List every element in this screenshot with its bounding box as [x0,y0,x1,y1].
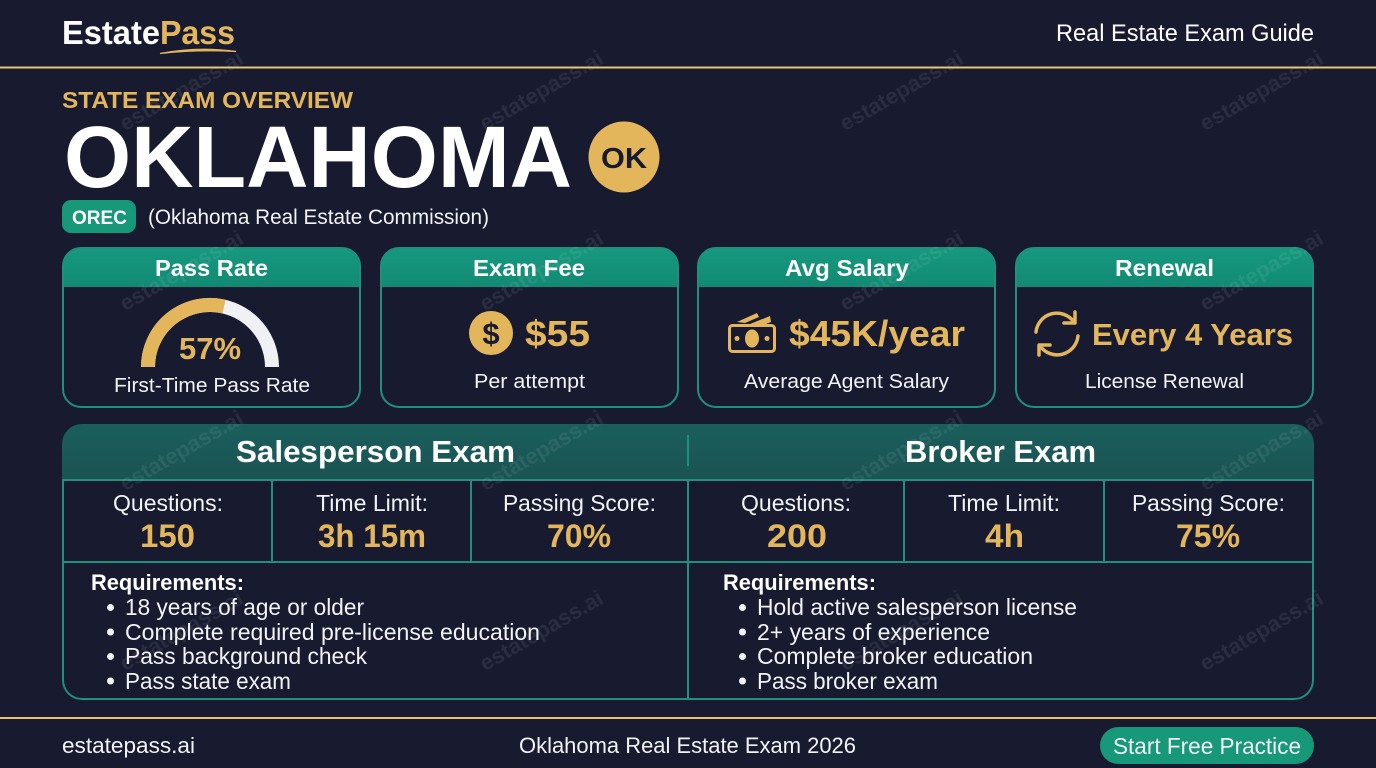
panel: exam fee: Per attempt [474,371,585,393]
panel: renewal [1016,248,1313,407]
icon: renewal arrows [1036,312,1078,355]
header tagline: Real Estate Exam Guide [1056,20,1314,47]
state badge [588,122,660,192]
salesperson requirements: Requirements: [91,570,244,595]
panel: renewal: Every 4 Years [1092,317,1293,352]
commission tag: OREC [72,208,127,229]
broker stats [741,490,1285,554]
header logo: Pass [160,14,235,51]
broker stats: Questions: [741,490,851,516]
broker heading: Broker Exam [905,434,1096,469]
panel: exam fee [381,248,678,407]
broker requirements: Hold active salesperson license [757,594,1077,620]
footer website: estatepass.ai [62,733,195,758]
panel: pass rate: Pass Rate [155,255,268,281]
watermarks: estatepass.ai [835,225,967,316]
watermarks: estatepass.ai [835,585,967,676]
commission name: (Oklahoma Real Estate Commission) [148,206,489,229]
watermarks [115,45,1327,676]
broker stats: Time Limit: [948,490,1060,516]
panel: average salary: Average Agent Salary [744,371,949,393]
gauge chart [148,305,272,367]
header logo [62,14,236,54]
panel: exam fee: $55 [525,313,590,354]
watermarks: estatepass.ai [835,45,967,136]
salesperson requirements [91,570,540,694]
header logo: Estate [62,14,160,51]
watermarks: estatepass.ai [115,225,247,316]
title: OKLAHOMA [64,109,572,206]
watermarks: estatepass.ai [115,405,247,496]
salesperson stats: Passing Score: [503,490,656,516]
commission tag [62,200,136,233]
broker stats: 4h [985,518,1024,554]
salesperson heading: Salesperson Exam [236,434,515,469]
salesperson requirements: Complete required pre-license education [125,619,540,645]
salesperson requirements: Pass background check [125,643,367,669]
broker requirements: Pass broker exam [757,668,938,694]
icon: dollar coin: $ [482,316,500,351]
broker stats: 75% [1176,518,1240,554]
watermarks: estatepass.ai [475,405,607,496]
broker stats: 200 [767,518,827,554]
panel: pass rate: First-Time Pass Rate [114,375,310,397]
panel: average salary: Avg Salary [785,255,909,281]
broker requirements: 2+ years of experience [757,619,990,645]
salesperson stats: 70% [547,518,611,554]
watermarks: estatepass.ai [475,225,607,316]
broker requirements [723,570,1077,694]
panel: average salary [698,248,995,407]
footer title: Oklahoma Real Estate Exam 2026 [519,733,856,758]
broker requirements: Requirements: [723,570,876,595]
watermarks: estatepass.ai [1195,585,1327,676]
panel: exam comparison [62,424,1314,699]
panel: average salary: $45K/year [789,313,965,354]
gauge chart: 57% [179,331,241,366]
broker requirements: Complete broker education [757,643,1033,669]
watermarks: estatepass.ai [1195,225,1327,316]
salesperson requirements: 18 years of age or older [125,594,364,620]
icon: dollar coin [469,311,513,355]
call to action button [1100,727,1314,764]
watermarks: estatepass.ai [1195,405,1327,496]
salesperson stats: 150 [140,518,195,554]
salesperson stats: Questions: [113,490,223,516]
panel: pass rate [63,248,360,407]
salesperson stats: 3h 15m [318,518,426,554]
panel: exam fee: Exam Fee [473,255,585,281]
broker stats: Passing Score: [1132,490,1285,516]
watermarks: estatepass.ai [1195,45,1327,136]
watermarks: estatepass.ai [835,405,967,496]
salesperson requirements: Pass state exam [125,668,291,694]
icon: cash stack [730,313,774,352]
eyebrow heading: STATE EXAM OVERVIEW [62,87,353,113]
watermarks: estatepass.ai [475,45,607,136]
panel: renewal: License Renewal [1085,371,1244,393]
watermarks: estatepass.ai [115,585,247,676]
call to action button: Start Free Practice [1113,733,1301,759]
salesperson stats: Time Limit: [316,490,428,516]
watermarks: estatepass.ai [115,45,247,136]
watermarks: estatepass.ai [475,585,607,676]
state badge: OK [601,143,647,175]
salesperson stats [113,490,656,554]
panel: renewal: Renewal [1115,255,1214,281]
